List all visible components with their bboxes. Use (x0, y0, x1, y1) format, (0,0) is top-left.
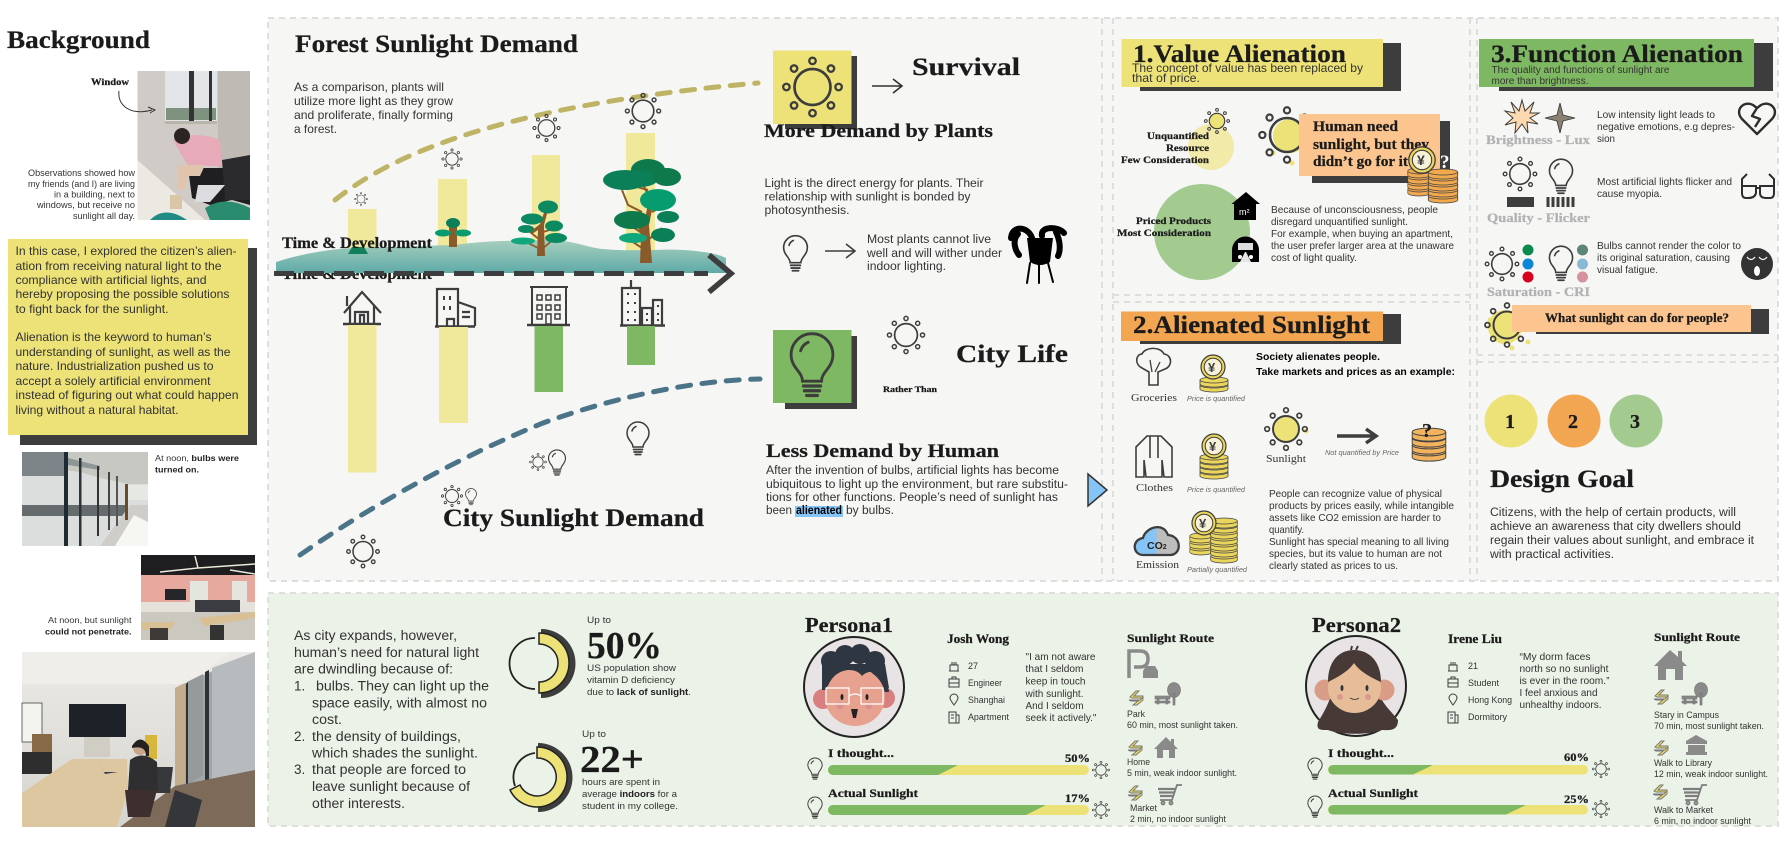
text: observations (28, 168, 136, 221)
diagram: priced products: Priced Products (1136, 217, 1211, 227)
text: sunlight could not penetrate: At noon, but sunlight (48, 615, 132, 625)
text: unconsciousness: Because of unconsciousness, people (1271, 204, 1438, 216)
bar: Josh actual 17%: 17% (1065, 791, 1090, 805)
callout: human need sunlight: sunlight, but they (1313, 137, 1430, 153)
hill (276, 240, 726, 273)
text: sunlight could not penetrate (45, 615, 132, 636)
diagram: unquantified resource: Resource (1166, 144, 1209, 154)
text: cri (1597, 240, 1741, 276)
avatar: Josh (804, 637, 904, 737)
route: Irene: Walk to Market (1654, 805, 1713, 815)
icon: house m2 (1232, 192, 1260, 220)
text: bulbs alienated: alienated (796, 505, 842, 517)
stat: 22 hours (580, 729, 678, 812)
row: groceries (1131, 348, 1246, 404)
profile list: Josh: Apartment (968, 712, 1009, 722)
quote: Josh: "I am not aware (1026, 651, 1096, 663)
header: value alienation: 1.Value Alienation (1133, 41, 1346, 68)
panel: forest and city sunlight demand (274, 31, 1068, 568)
profile list: Irene (1448, 661, 1512, 723)
chart: 50% donut (510, 629, 576, 698)
text: low intensity (1597, 109, 1735, 145)
route: Irene (1653, 630, 1768, 826)
text: unconsciousness: the user prefer larger area at the unaware (1271, 240, 1454, 252)
text: value of products: clearly stated as prices to us. (1269, 560, 1398, 572)
text: value of products (1269, 488, 1454, 572)
text: plants wither (866, 234, 1002, 273)
icon: bulb to plant (784, 236, 807, 271)
profile list: Josh: 27 (968, 661, 978, 671)
text: photosynthesis (764, 178, 984, 217)
callout: introduction yellow box (8, 239, 257, 445)
profile list: Josh (949, 661, 1009, 723)
name: Irene Liu: Irene Liu (1448, 631, 1502, 646)
text: city expansion list: As city expands, however, (294, 628, 457, 643)
text: city expansion list: are dwindling because of: (294, 662, 453, 676)
diagram: unquantified resource: Unquantified (1147, 132, 1210, 142)
route: Irene: 6 min, no indoor sunlight (1654, 816, 1751, 826)
icon: broken heart (1739, 104, 1775, 134)
panel: 1. Value Alienation (1117, 39, 1458, 280)
callout: human need sunlight (1299, 114, 1450, 183)
photo: friend by the window (138, 71, 250, 220)
callout: introduction yellow box: instead of figuring out what could happen (16, 388, 239, 402)
text: bulbs alienated: After the invention of bulbs, artificial lights has become (766, 465, 1059, 477)
icon: seedling (348, 247, 368, 254)
row: saturation (1485, 244, 1590, 299)
header: function alienation: 3.Function Alienation (1491, 41, 1743, 68)
heading: More Demand by Plants: More Demand by Plants (764, 121, 993, 142)
quote: Irene: unhealthy indoors. (1520, 699, 1602, 711)
chart: city sunlight bars falling (348, 325, 655, 472)
bar: Josh I thought 50% (808, 746, 1110, 779)
diagram: priced products (1117, 184, 1250, 280)
heading: Less Demand by Human: Less Demand by Human (766, 441, 999, 462)
text: bulbs turned on: turned on. (155, 464, 199, 474)
text: design goal: regain their values about sunlight, and embrace it (1490, 535, 1755, 547)
text: observations: Observations showed how (28, 168, 136, 178)
header: function alienation: more than brightness. (1492, 76, 1588, 87)
text: sunlight could not penetrate: could not penetrate. (45, 626, 132, 636)
icon: bulb on green square (773, 330, 857, 409)
label: Time & Development above the hill: Time & Development (282, 235, 433, 252)
profile list: Irene: 21 (1468, 661, 1478, 671)
panel: top main panels frame (268, 18, 1778, 581)
icon: apartment block (527, 287, 570, 325)
label: Window with arrow (91, 78, 155, 113)
photo: open office (141, 555, 255, 640)
text: city expansion list (294, 628, 489, 811)
icon: small tree (435, 218, 471, 247)
text: unconsciousness: cost of light quality. (1271, 252, 1357, 264)
icon: coins and question: ¥ (1417, 152, 1425, 168)
header: value alienation: The concept of value has been replaced by (1132, 61, 1363, 75)
callout: introduction yellow box: living without a natural habitat. (16, 403, 179, 417)
quote: Irene (1520, 651, 1610, 711)
quote: Josh: with sunlight. (1025, 688, 1084, 700)
icons: sun to bulb progression (347, 422, 649, 568)
panel: persona 1 (804, 613, 1238, 824)
header: alienated sunlight: 2.Alienated Sunlight (1133, 312, 1371, 339)
row: clothes: Clothes (1136, 482, 1173, 494)
icon: coins and question (1408, 147, 1458, 203)
icon: sunlight not quantified: Sunlight (1266, 453, 1306, 465)
text: low intensity: negative emotions, e.g depres- (1597, 121, 1735, 133)
stat: 22 hours: hours are spent in (582, 777, 660, 788)
text: design goal (1489, 507, 1755, 561)
route: Josh: 5 min, weak indoor sunlight. (1127, 768, 1237, 778)
row: quality flicker: Quality - Flicker (1487, 210, 1590, 225)
callout: introduction yellow box: ation from receiving natural light to the (16, 259, 222, 273)
stat: 22 hours: Up to (582, 729, 606, 740)
text: observations: windows, but receive no (36, 200, 135, 210)
text: cri: visual fatigue. (1597, 264, 1658, 276)
text: society alienates people: Society alienates people. (1256, 351, 1380, 363)
icon: sun on yellow square (773, 50, 857, 129)
text: bulbs alienated: tions for other functions. People’s need of sunlight has (766, 492, 1058, 504)
route: Irene: Stary in Campus (1654, 710, 1719, 720)
number circles (1484, 394, 1662, 448)
text: design goal: with practical activities. (1489, 549, 1614, 561)
bar: Josh I thought 50%: I thought... (828, 746, 894, 760)
icon: withered plant (1011, 228, 1064, 283)
panel: background column (7, 27, 257, 827)
text: plants comparison: As a comparison, plants will (294, 80, 444, 94)
quote: Irene: “My dorm faces (1520, 651, 1590, 663)
row: emission: Emission (1136, 559, 1180, 571)
text: bulbs turned on: At noon, bulbs were (155, 453, 239, 463)
icon: medium tree (511, 200, 567, 256)
name: Josh Wong: Josh Wong (947, 631, 1009, 646)
header: alienated sunlight (1121, 312, 1401, 344)
text: city expansion list: 1. (294, 678, 305, 694)
route: Irene: Sunlight Route (1654, 630, 1741, 644)
route: Irene: 12 min, weak indoor sunlight. (1654, 769, 1768, 779)
text: plants comparison: utilize more light as they grow (294, 94, 453, 108)
icon: sun rather than (887, 316, 925, 354)
text: value of products: assets like CO2 emission are harder to (1269, 512, 1441, 524)
bar: Irene I thought 60%: 60% (1564, 750, 1589, 764)
text: city expansion list: space easily, with almost no (312, 696, 487, 710)
route: Irene: 70 min, most sunlight taken. (1654, 721, 1764, 731)
stat: 22 hours: average indoors for a (582, 789, 678, 800)
header: value alienation: that of price. (1132, 71, 1200, 85)
text: value of products: products by prices easily, while intangible (1269, 500, 1454, 512)
callout: introduction yellow box: understanding of sunlight, as well as the (16, 345, 231, 359)
text: photosynthesis: relationship with sunlight is bonded by (764, 192, 971, 204)
text: city expansion list: the density of buildings, (312, 729, 461, 744)
icon: large tree (603, 159, 681, 263)
text: plants comparison: and proliferate, finally forming (294, 108, 453, 122)
text: bulbs turned on (155, 453, 239, 474)
text: observations: sunlight all day. (73, 211, 135, 221)
profile list: Josh: Shanghai (968, 695, 1005, 705)
route: Josh: Park (1127, 709, 1145, 719)
text: city expansion list: bulbs. They can light up the (316, 678, 489, 694)
callout: introduction yellow box: nature. Industrialization pushed us to (16, 359, 214, 373)
bar: Irene actual 25%: 25% (1564, 792, 1589, 806)
quote: Josh: keep in touch (1026, 676, 1086, 688)
text: city expansion list: that people are forced to (312, 762, 466, 777)
row: saturation: Saturation - CRI (1487, 284, 1590, 299)
icon: glasses (1742, 174, 1774, 198)
panel: persona 2 (1306, 613, 1768, 826)
text: flicker: Most artificial lights flicker and (1597, 176, 1732, 188)
text: value of products: Sunlight has special meaning to all living (1269, 536, 1449, 548)
heading: Persona2: Persona2 (1312, 613, 1401, 637)
text: Rather Than: Rather Than (883, 384, 937, 394)
icon: big sun (1259, 107, 1315, 166)
heading: Survival: Survival (912, 54, 1020, 81)
diagram: unquantified resource (1121, 108, 1234, 170)
profile list: Irene: Hong Kong (1468, 695, 1512, 705)
photo: meeting room (22, 652, 255, 827)
row: emission: Partially quantified (1187, 565, 1248, 574)
header: value alienation (1122, 39, 1401, 91)
axis: dashed time arrow (274, 255, 731, 292)
text: bulbs alienated: by bulbs. (846, 505, 894, 517)
bar: Irene I thought 60% (1308, 746, 1610, 779)
row: brightness: Brightness - Lux (1486, 132, 1591, 147)
icons: growing suns (354, 93, 661, 206)
text: low intensity: Low intensity light leads to (1597, 109, 1715, 121)
avatar: Irene (1306, 636, 1406, 736)
text: bulbs alienated (766, 465, 1068, 517)
text: value of products: species, but its value to human are not (1269, 548, 1442, 560)
text: observations: in a building, next to (54, 190, 135, 200)
text: city expansion list: 3. (294, 762, 305, 777)
text: city expansion list: which shades the sunlight. (311, 746, 478, 760)
text: unconsciousness (1271, 204, 1454, 264)
route: Josh: Home (1127, 757, 1150, 767)
quote: Irene: I feel anxious and (1520, 687, 1598, 699)
panel: 3. Function Alienation (1479, 39, 1775, 350)
callout: human need sunlight: didn’t go for it (1313, 154, 1408, 170)
quote: Josh (1025, 651, 1097, 724)
icon: train (1232, 236, 1259, 262)
row: groceries: ¥ (1208, 360, 1216, 375)
stat: 50 percent (587, 615, 691, 698)
text: city expansion list: other interests. (312, 796, 405, 811)
text: flicker: cause myopia. (1597, 188, 1662, 200)
icon: skyline (620, 280, 665, 326)
bar: Josh actual 17% (808, 786, 1110, 819)
number circles: 1 (1505, 411, 1515, 433)
text: plants wither: well and will wither under (866, 248, 1002, 260)
heading: Forest Sunlight Demand: Forest Sunlight Demand (295, 31, 578, 58)
diagram: unquantified resource: Few Consideration (1121, 156, 1210, 166)
bar: Josh I thought 50%: 50% (1065, 751, 1090, 765)
row: emission: CO2 (1147, 540, 1167, 552)
row: groceries: Price is quantified (1187, 394, 1246, 403)
text: photosynthesis: photosynthesis. (764, 205, 850, 217)
text: plants comparison: a forest. (294, 122, 337, 136)
quote: Josh: that I seldom (1026, 663, 1084, 675)
text: bulbs alienated: been (766, 505, 792, 517)
row: clothes: ¥ (1209, 439, 1217, 454)
bar: Josh actual 17%: Actual Sunlight (828, 786, 918, 800)
callout: what sunlight can do: What sunlight can do for people? (1545, 311, 1729, 325)
stat: 50 percent: 50% (587, 625, 662, 667)
text: photosynthesis: Light is the direct energy for plants. Their (764, 178, 984, 190)
text: unconsciousness: disregard unquantified sunlight. (1271, 216, 1408, 228)
heading: Background: Background (7, 27, 150, 54)
icon: house m2: m² (1239, 207, 1250, 217)
text: cri: Bulbs cannot render the color to (1597, 240, 1741, 252)
callout: introduction yellow box: hereby proposing the possible solutions (16, 287, 229, 301)
profile list: Irene: Dormitory (1468, 712, 1507, 722)
icon: tired face (1741, 248, 1773, 280)
text: flicker (1597, 176, 1732, 200)
text: value of products: People can recognize value of physical (1269, 488, 1442, 500)
route: Josh: 2 min, no indoor sunlight (1130, 814, 1226, 824)
curve: forest demand dashed line (335, 83, 758, 200)
heading: City Life: City Life (956, 341, 1068, 368)
callout: introduction yellow box: Alienation is the keyword to human’s (16, 330, 212, 344)
text: city expansion list: 2. (294, 729, 305, 744)
route: Josh (1127, 631, 1238, 824)
stat: 50 percent: US population show (587, 663, 676, 674)
stat: 50 percent: vitamin D deficiency (587, 675, 675, 686)
icon: house (343, 292, 381, 324)
text: plants wither: Most plants cannot live (867, 234, 991, 246)
stat: 50 percent: due to lack of sunlight. (587, 687, 691, 698)
panel: bottom persona frame (268, 593, 1778, 826)
header: function alienation: The quality and functions of sunlight are (1492, 65, 1670, 76)
icon: sunlight not quantified: Not quantified by Price (1325, 448, 1399, 457)
row: brightness (1486, 100, 1591, 147)
stat: 22 hours: student in my college. (582, 801, 678, 812)
callout: human need sunlight: Human need (1313, 119, 1399, 135)
text: plants comparison (294, 80, 453, 136)
callout: introduction yellow box: accept a solely artificial environment (16, 374, 211, 388)
text: low intensity: sion (1597, 133, 1615, 145)
text: society alienates people (1256, 351, 1455, 378)
bar: Irene actual 25% (1308, 786, 1610, 818)
curve: city demand dashed line (300, 379, 760, 555)
text: city expansion list: human’s need for natural light (294, 645, 479, 660)
quote: Josh: And I seldom (1026, 700, 1084, 712)
header: function alienation (1479, 39, 1773, 91)
text: observations: my friends (and I) are living (28, 179, 135, 189)
route: Josh: 60 min, most sunlight taken. (1127, 720, 1238, 730)
bar: Irene I thought 60%: I thought... (1328, 746, 1394, 760)
route: Irene: Walk to Library (1654, 758, 1712, 768)
route: Josh: Sunlight Route (1127, 631, 1215, 645)
callout: introduction yellow box: to fight back for the sunlight. (16, 302, 168, 316)
quote: Josh: seek it actively." (1026, 712, 1097, 724)
diagram: priced products: Most Consideration (1117, 229, 1212, 239)
icon: sunlight not quantified (1265, 408, 1446, 465)
stat: 50 percent: Up to (587, 615, 611, 626)
photo: corridor (22, 452, 148, 546)
text: value of products: quantify. (1269, 524, 1304, 536)
row: quality flicker (1487, 157, 1590, 225)
arrow (872, 79, 902, 93)
callout: introduction yellow box: In this case, I explored the citizen’s alien- (16, 244, 237, 258)
profile list: Irene: Student (1468, 678, 1499, 688)
heading: Persona1: Persona1 (805, 613, 893, 637)
text: society alienates people: Take markets and prices as an example: (1256, 366, 1455, 378)
text: unconsciousness: For example, when buying an apartment, (1271, 228, 1453, 240)
label: Window with arrow: Window (91, 78, 129, 88)
panel: design goal (1484, 394, 1755, 561)
text: plants wither: indoor lighting. (867, 261, 946, 273)
arrow (825, 244, 855, 258)
text: cri: its original saturation, causing (1597, 252, 1730, 264)
profile list: Josh: Engineer (968, 678, 1002, 688)
row: emission (1135, 511, 1248, 574)
number circles: 3 (1630, 411, 1640, 433)
stat: 22 hours: 22+ (580, 739, 644, 781)
quote: Irene: north so no sunlight (1520, 663, 1609, 675)
callout: what sunlight can do (1512, 305, 1769, 334)
route: Josh: Market (1130, 803, 1157, 813)
number circles: 2 (1568, 411, 1578, 433)
text: city expansion list: leave sunlight because of (312, 779, 470, 794)
heading: City Sunlight Demand: City Sunlight Demand (443, 505, 704, 532)
callout: introduction yellow box: compliance with artificial lights, and (16, 273, 206, 287)
text: bulbs alienated: ubiquitous to light up the environment, but rare substitu- (766, 479, 1068, 491)
icon: sunlight not quantified: ? (1422, 420, 1432, 442)
bar: Irene actual 25%: Actual Sunlight (1328, 786, 1418, 800)
heading: Design Goal: Design Goal (1490, 466, 1634, 493)
icon: coins and question: ? (1440, 152, 1450, 173)
row: emission: ¥ (1199, 516, 1207, 531)
arrow: blue triangle (1088, 474, 1107, 506)
row: clothes (1136, 434, 1246, 494)
row: groceries: Groceries (1131, 392, 1177, 404)
panel: 2. Alienated Sunlight (1121, 312, 1455, 574)
text: city expansion list: cost. (312, 712, 342, 727)
chart: sunlight bars rising (348, 133, 655, 254)
quote: Irene: is ever in the room.” (1520, 675, 1610, 687)
label: Time & Development under the axis: Time & Development (282, 266, 433, 283)
icon: office building (435, 289, 475, 326)
row: clothes: Price is quantified (1187, 485, 1246, 494)
chart: 22+ donut (510, 743, 573, 812)
text: design goal: Citizens, with the help of certain products, will (1490, 507, 1736, 519)
icon: sun beside question bar (1485, 303, 1530, 350)
text: design goal: achieve an awareness that city dwellers should (1490, 521, 1741, 533)
